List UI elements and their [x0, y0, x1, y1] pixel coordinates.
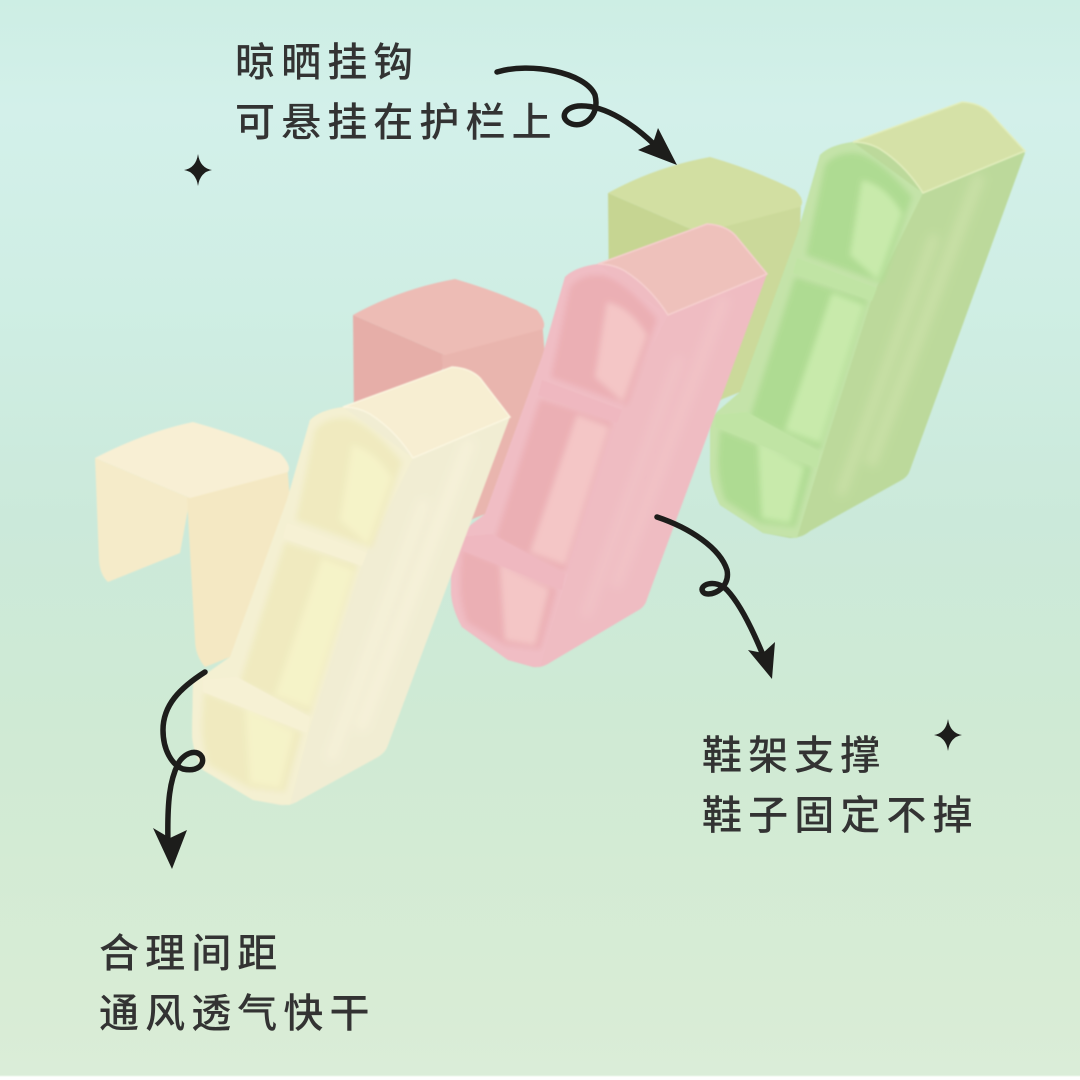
pink shoe tray — [451, 224, 767, 667]
green shoe tray — [710, 102, 1025, 538]
text: shoe support note: 鞋架支撑 — [702, 734, 886, 778]
pink tray pockets — [460, 275, 657, 649]
arrow: to hanging hook — [497, 68, 677, 165]
pink shelf dividers — [458, 380, 622, 590]
text: hanging hook note — [235, 41, 558, 145]
yellow shoe tray — [192, 367, 510, 805]
text: spacing note: 通风透气快干 — [99, 992, 376, 1036]
product: pink shoe hook — [353, 224, 767, 667]
yellow shelf dividers — [203, 523, 367, 733]
text: spacing note — [99, 932, 376, 1036]
arrow: to shoe support — [657, 517, 775, 679]
icon: sparkle right — [934, 719, 962, 751]
text: hanging hook note: 晾晒挂钩 — [235, 41, 419, 85]
pink hanging hook — [353, 279, 545, 524]
product: yellow shoe hook — [95, 367, 510, 805]
text: spacing note: 合理间距 — [99, 932, 283, 976]
green shelf dividers — [715, 258, 877, 468]
yellow side marbling — [330, 440, 470, 760]
arrow: to spacing note — [153, 672, 205, 869]
pink side marbling — [585, 297, 725, 617]
text: shoe support note: 鞋子固定不掉 — [702, 794, 979, 838]
product: green shoe hook — [608, 102, 1025, 538]
green hanging hook — [608, 157, 802, 402]
icon: sparkle top left — [184, 154, 212, 186]
green tray pockets — [718, 153, 912, 527]
green side marbling — [840, 175, 980, 495]
text: hanging hook note: 可悬挂在护栏上 — [235, 101, 558, 145]
text: shoe support note — [702, 734, 979, 838]
yellow hanging hook — [95, 422, 290, 667]
yellow tray pockets — [202, 418, 402, 792]
